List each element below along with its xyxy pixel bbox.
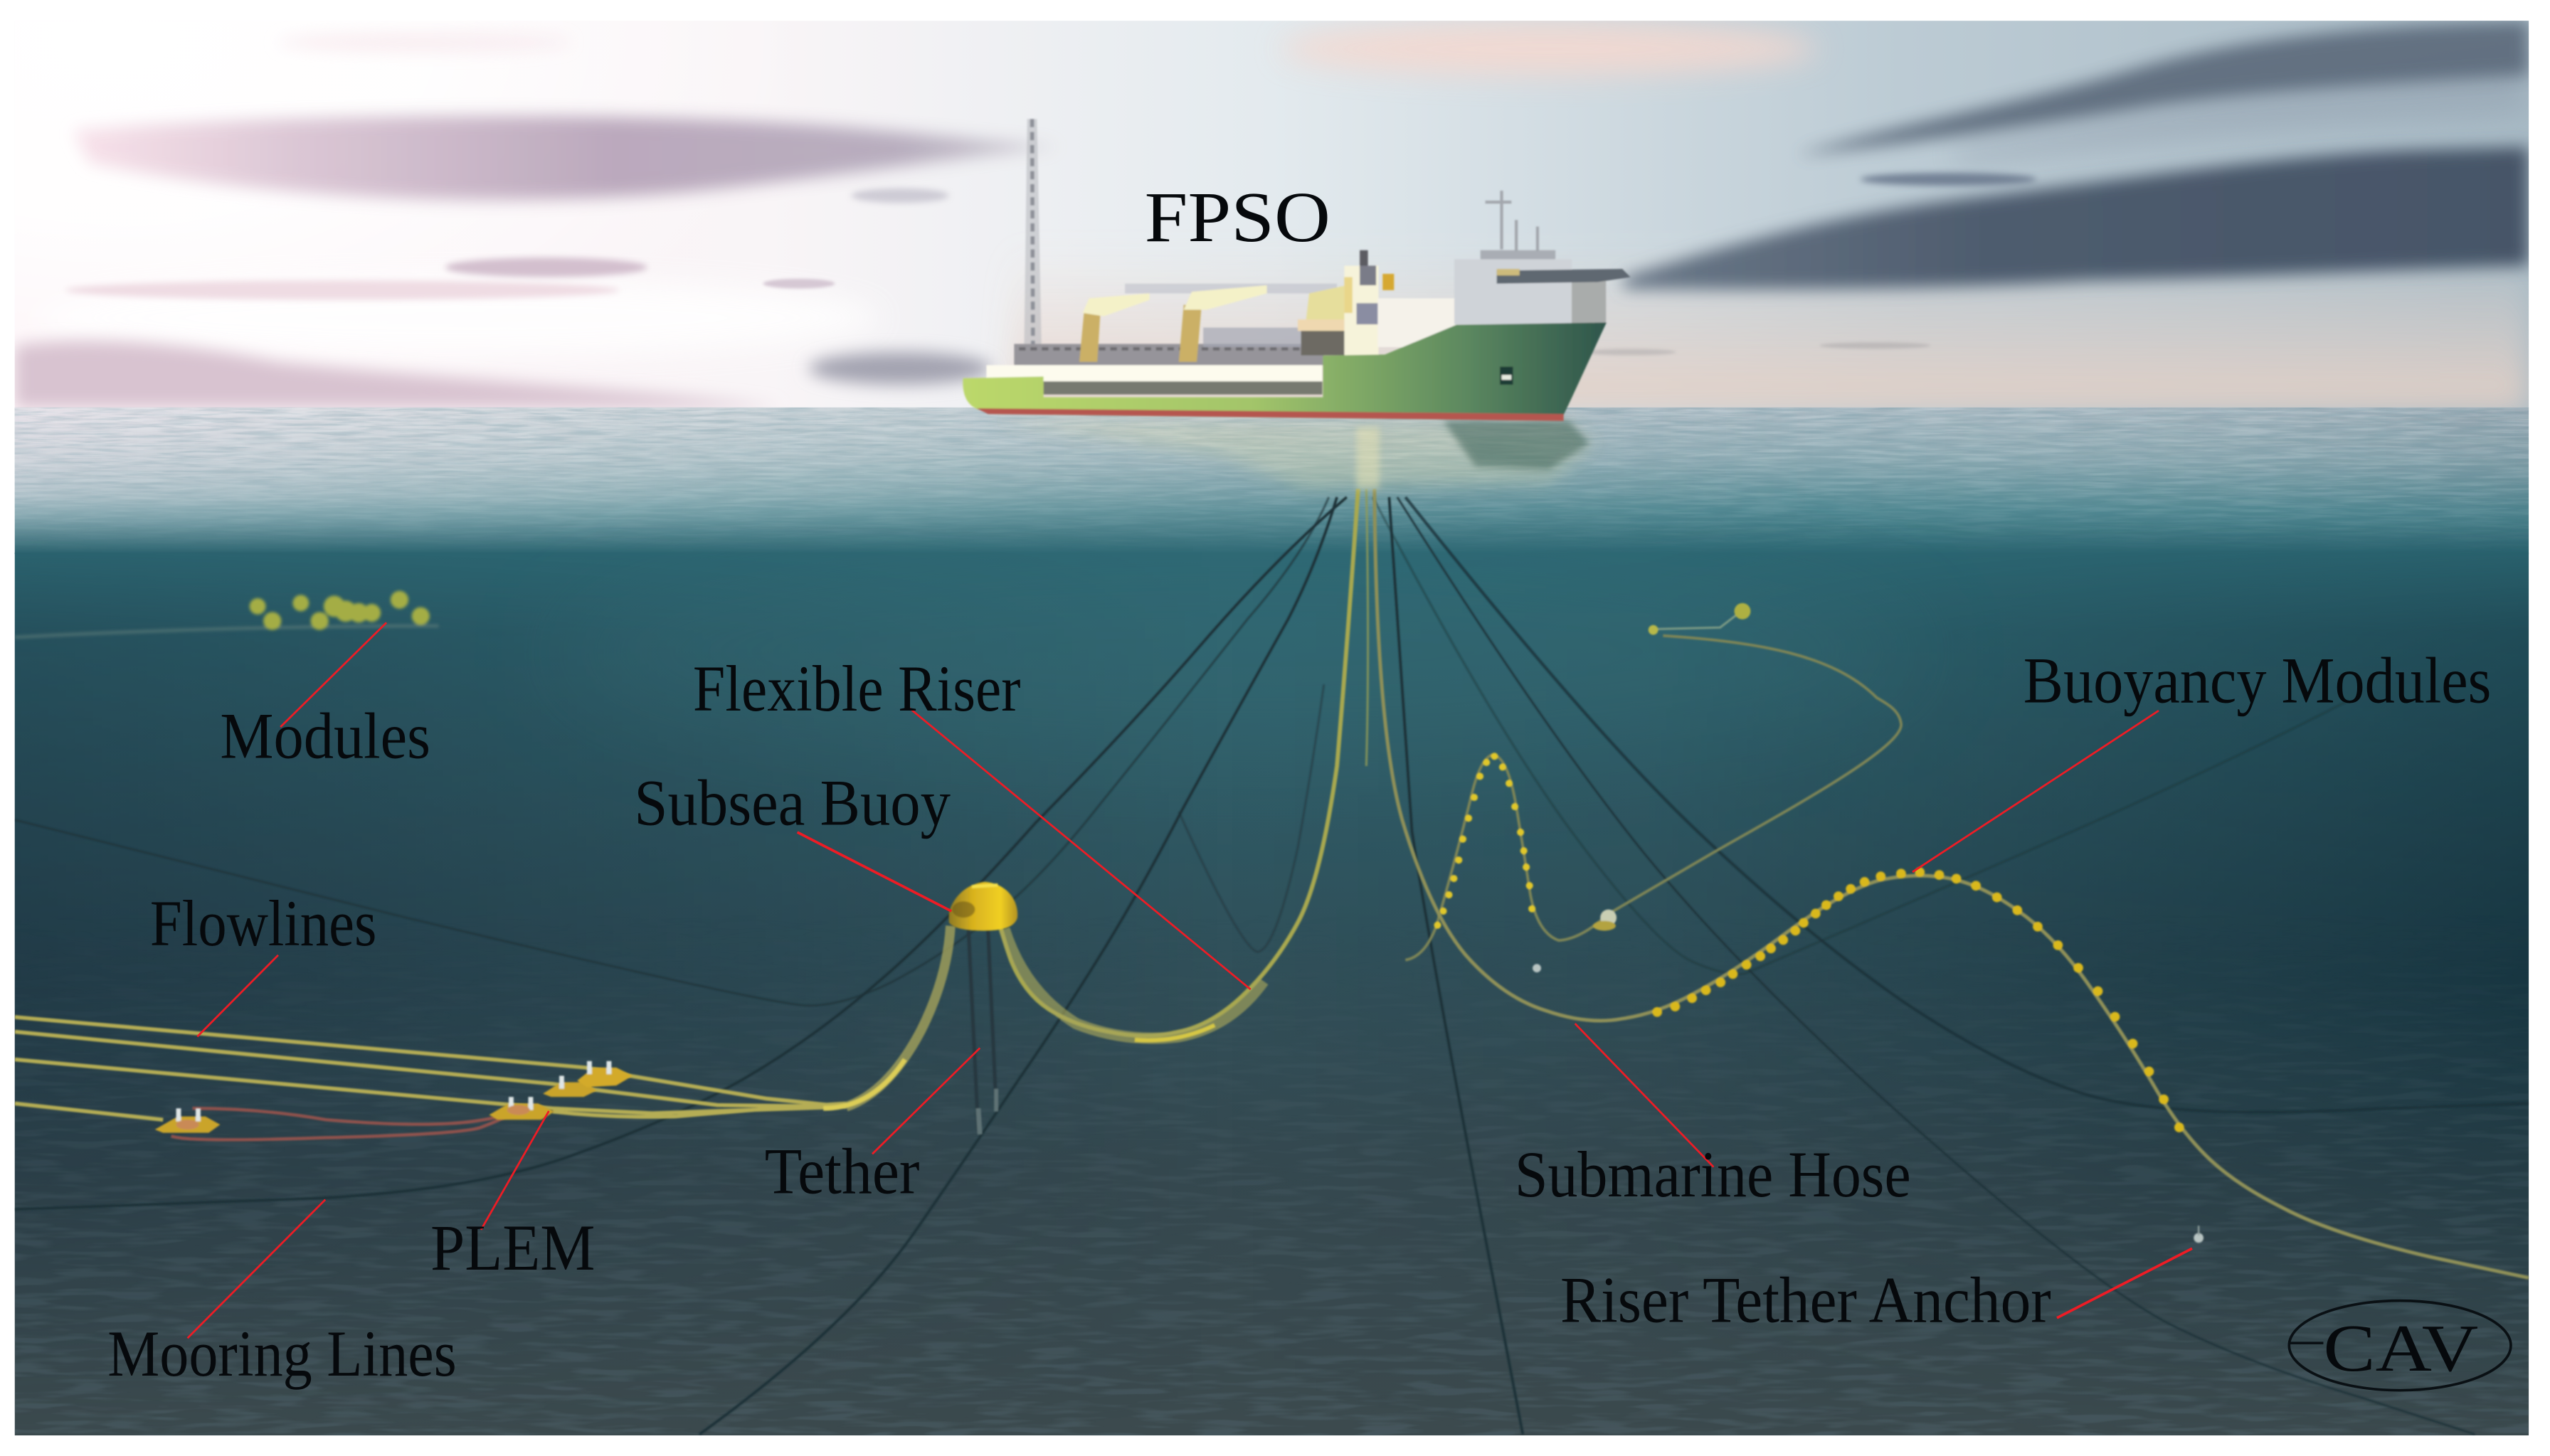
label: Submarine Hose: Submarine Hose <box>1515 1138 1911 1211</box>
label: Tether: Tether <box>765 1134 919 1207</box>
ship reflection <box>995 420 1594 489</box>
white deck block <box>986 365 1322 382</box>
PLEM unit 2 <box>489 1097 554 1120</box>
logo: CAV <box>2289 1301 2511 1391</box>
logo: CAV: CAV <box>2323 1312 2478 1386</box>
deck cranes <box>1079 285 1347 362</box>
PLEMs <box>155 1061 633 1133</box>
submarine hose with buoyancy modules <box>1375 489 2529 1278</box>
label leader lines <box>188 622 2192 1338</box>
lazy wave riser with floats <box>1405 603 1901 960</box>
clouds: dark right <box>1585 21 2529 356</box>
FPSO ship <box>963 119 1631 489</box>
label: FPSO: FPSO <box>1145 177 1330 257</box>
subsea buoy <box>949 882 1017 930</box>
tether lines <box>968 929 996 1134</box>
clouds: purple left <box>15 116 1060 408</box>
small modules <box>15 591 438 637</box>
flowlines <box>15 926 951 1120</box>
flexible riser <box>998 489 1368 1041</box>
sea surface <box>15 408 2529 554</box>
red waterline <box>977 408 1564 421</box>
underwater gradient <box>15 521 2529 1435</box>
label: Riser Tether Anchor: Riser Tether Anchor <box>1560 1263 2051 1336</box>
deck equipment <box>1014 344 1324 365</box>
label: Buoyancy Modules: Buoyancy Modules <box>2023 644 2491 717</box>
label: Flowlines: Flowlines <box>150 887 376 960</box>
seabed ripples <box>15 913 2529 1435</box>
riser tether anchors <box>1533 964 2204 1243</box>
PLEM unit 3 <box>543 1075 597 1097</box>
label: Flexible Riser: Flexible Riser <box>693 652 1021 725</box>
hull <box>963 322 1607 420</box>
label: PLEM: PLEM <box>430 1211 595 1284</box>
label: Subsea Buoy: Subsea Buoy <box>634 767 951 839</box>
label: Mooring Lines: Mooring Lines <box>107 1317 457 1390</box>
drilling derrick <box>1024 119 1042 367</box>
mooring lines <box>15 497 2529 1435</box>
mid tower with funnel <box>1344 250 1456 356</box>
label: Modules: Modules <box>220 700 430 772</box>
red jumper pipes <box>171 1108 509 1139</box>
bridge superstructure <box>1454 250 1631 324</box>
PLEM unit 4 <box>577 1061 633 1087</box>
porthole <box>1500 367 1513 385</box>
aft house <box>1298 319 1350 331</box>
masts <box>1486 191 1538 251</box>
PLEM unit 1 <box>155 1108 220 1133</box>
sky background <box>15 21 2529 412</box>
